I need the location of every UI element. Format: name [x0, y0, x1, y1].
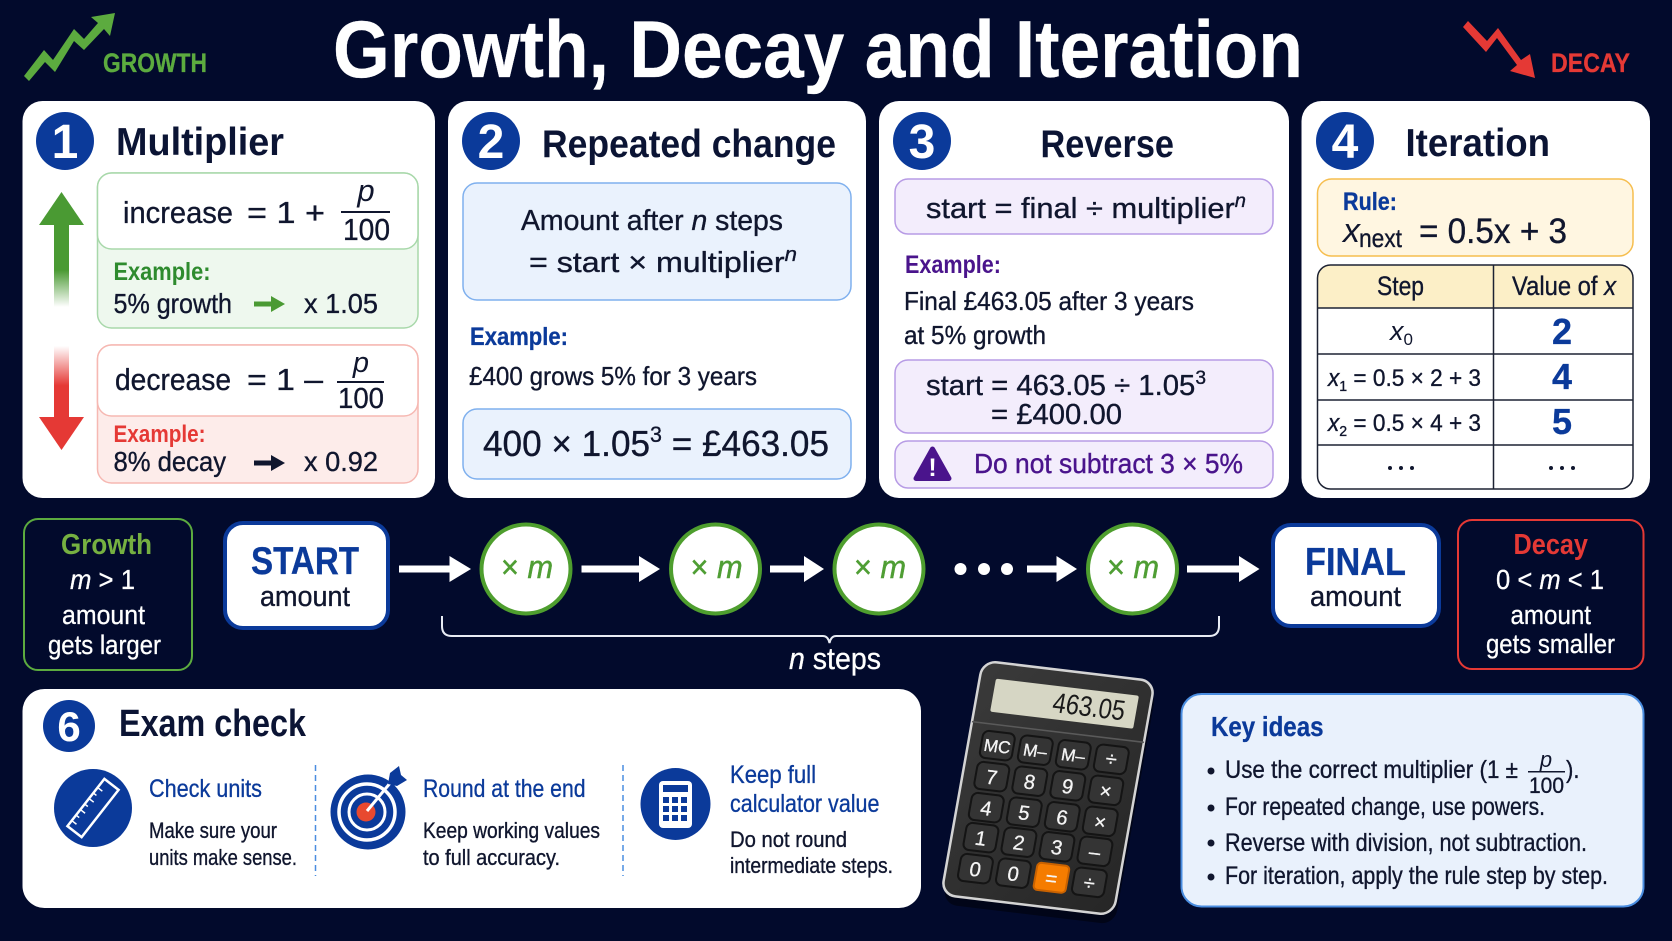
box: rule: [1318, 179, 1633, 256]
badge 2: [462, 112, 520, 170]
bullet: multiplier: 100: [1529, 773, 1564, 798]
flow: multiplier last step: [1088, 524, 1177, 614]
icon: growth arrow with label: [24, 13, 207, 81]
calculator keys: M–: [1022, 739, 1049, 762]
flow: ellipsis dots: [954, 563, 1013, 575]
flow: final box: FINAL: [1305, 541, 1406, 584]
calculator keys: ÷: [1104, 748, 1119, 771]
box: amount formula: Amount after n steps: [521, 205, 783, 237]
callout: decay condition: 0 < m < 1: [1496, 564, 1604, 595]
badge 6: 6: [57, 703, 81, 750]
box: decrease formula: 8% decay: [114, 446, 226, 477]
flow: multiplier step 2: [671, 524, 760, 614]
calculator keys: ×: [1092, 811, 1108, 834]
heading: repeated change: Repeated change: [542, 123, 836, 166]
text: keep full calculator value: Keep full: [730, 761, 816, 789]
brace with n steps label: [442, 616, 1219, 676]
box: worked reverse: 3: [1195, 368, 1206, 389]
panel: exam check: [22, 689, 921, 908]
callout: growth condition: [24, 519, 192, 670]
example text: Example:: [470, 323, 568, 351]
box: increase formula: 5% growth: [114, 288, 232, 319]
table: iteration steps: Value of x: [1512, 271, 1617, 301]
brace with n steps label: n steps: [789, 641, 881, 676]
flow: final box: amount: [1310, 581, 1401, 613]
calculator keys: 8: [1022, 771, 1037, 794]
title: Growth, Decay and Iteration: [333, 5, 1303, 95]
box: worked reverse: start = 463.05 ÷ 1.05: [926, 370, 1193, 402]
flow: start box: [225, 523, 388, 628]
calculator keys: M–: [1060, 744, 1087, 767]
icon: growth arrow with label: GROWTH: [103, 48, 207, 78]
table: iteration steps: x: [1327, 365, 1340, 392]
box: rule: = 0.5x + 3: [1419, 212, 1567, 251]
callout: decay condition: amount: [1510, 600, 1591, 630]
calculator keys: 3: [1049, 837, 1064, 860]
table ellipsis dots: [1388, 466, 1575, 470]
calculator keys: 1: [973, 828, 988, 851]
example text: at 5% growth: [904, 320, 1046, 350]
box: worked result: = £463.05: [662, 423, 829, 464]
table: iteration steps: 2: [1552, 311, 1572, 352]
table: iteration steps: 1: [1339, 378, 1347, 395]
calculator keys: [957, 730, 1130, 898]
panel: iteration: [1302, 101, 1650, 498]
flow: multiplier step 3: [834, 524, 924, 614]
panel: key ideas: [1182, 694, 1644, 906]
box: reverse formula: [895, 179, 1273, 234]
illustration: calculator: [940, 661, 1158, 925]
icon: calculator: [640, 768, 710, 840]
box: amount formula: [463, 183, 851, 300]
calculator keys: ×: [1098, 780, 1113, 803]
calculator keys: 0: [1006, 863, 1021, 886]
box: amount formula: n: [785, 244, 797, 266]
arrow: step 1 to step 2: [582, 556, 660, 582]
box: decrease formula: Example:: [114, 421, 206, 448]
box: reverse formula: start = final ÷ multiplier: [926, 193, 1217, 225]
box: increase formula: p: [356, 173, 375, 208]
panel: repeated change: [448, 101, 866, 498]
text: keep full calculator value: calculator value: [730, 790, 880, 818]
text: round at the end: Round at the end: [423, 775, 586, 803]
calculator keys: 0: [968, 859, 983, 882]
badge 2: 2: [478, 116, 504, 169]
box: increase formula: x 1.05: [304, 288, 378, 319]
callout: warning: !: [928, 454, 937, 482]
box: decrease formula: 100: [338, 383, 384, 415]
heading: key ideas: Key ideas: [1211, 711, 1324, 742]
icon: decay arrow with label: [1463, 21, 1630, 78]
icon: green up arrow: [39, 192, 84, 307]
flow: multiplier step 2: × m: [690, 549, 742, 585]
text: round at the end: to full accuracy.: [423, 845, 560, 870]
text: check units: Make sure your: [149, 818, 277, 843]
box: decrease formula: = 1 –: [247, 362, 324, 397]
flow: final box: [1273, 525, 1439, 626]
example text: Final £463.05 after 3 years: [904, 286, 1194, 316]
calculator keys: 2: [1011, 832, 1026, 855]
callout: decay condition: gets smaller: [1486, 629, 1615, 659]
table: iteration steps: 4: [1552, 356, 1572, 397]
arrow: step 2 to step 3: [770, 556, 824, 582]
table: iteration steps: = 0.5 × 4 + 3: [1347, 410, 1481, 437]
icon: ruler: [54, 769, 132, 847]
callout: growth condition: m > 1: [70, 564, 135, 595]
box: rule: Rule:: [1343, 188, 1397, 216]
flow: start box: amount: [260, 581, 350, 613]
bullet: multiplier: [1208, 747, 1580, 798]
badge 3: [893, 112, 951, 170]
callout: decay condition: [1458, 520, 1644, 669]
box: increase formula: increase: [123, 195, 233, 230]
box: worked reverse: = £400.00: [991, 399, 1122, 431]
bullet: reverse: Reverse with division, not subtraction.: [1225, 829, 1587, 857]
table: iteration steps: Step: [1377, 271, 1424, 301]
example text: [469, 323, 757, 391]
calculator keys: 5: [1017, 802, 1032, 825]
box: rule: x: [1341, 212, 1361, 250]
callout: growth condition: gets larger: [48, 630, 161, 660]
calculator keys: 4: [979, 798, 994, 821]
flow: start box: START: [251, 540, 359, 583]
box: increase formula: Example:: [114, 258, 210, 286]
badge 1: [36, 112, 94, 170]
badge 4: [1316, 112, 1374, 170]
box: decrease formula: p: [352, 347, 369, 379]
heading: reverse: Reverse: [1040, 123, 1174, 166]
table: iteration steps: [1318, 265, 1633, 489]
icon: target: [330, 766, 407, 850]
bullet: multiplier: p: [1539, 747, 1552, 772]
calculator display: [990, 679, 1139, 729]
calculator keys: =: [1043, 868, 1059, 891]
callout: growth condition: Growth: [61, 529, 152, 561]
text: keep full calculator value: Do not round: [730, 827, 847, 852]
calculator keys: ÷: [1082, 872, 1097, 895]
text: keep full calculator value: [730, 761, 893, 878]
heading: exam check: Exam check: [119, 703, 307, 745]
bullet: multiplier: ).: [1566, 756, 1580, 784]
table: iteration steps: 5: [1552, 401, 1572, 442]
calculator keys: MC: [982, 735, 1012, 758]
calculator keys: 6: [1055, 807, 1070, 830]
callout: warning: Do not subtract 3 × 5%: [974, 448, 1243, 479]
callout: decay condition: Decay: [1514, 529, 1588, 561]
flow: multiplier last step: × m: [1107, 549, 1159, 585]
icon: red down arrow: [39, 346, 84, 450]
icon: decay arrow with label: DECAY: [1551, 48, 1630, 78]
callout: growth condition: amount: [62, 600, 145, 630]
text: check units: [149, 775, 297, 870]
example text: £400 grows 5% for 3 years: [469, 361, 757, 391]
box: worked result: 3: [650, 422, 662, 447]
badge 6: [43, 700, 95, 752]
example text: [904, 251, 1194, 350]
flow: multiplier step 1: × m: [501, 549, 553, 585]
badge 1: 1: [52, 116, 78, 169]
calculator keys: –: [1087, 841, 1103, 865]
box: increase formula: [98, 173, 418, 328]
box: decrease formula: x 0.92: [304, 446, 378, 477]
box: amount formula: = start × multiplier: [529, 247, 759, 279]
calculator keys: 7: [984, 767, 999, 790]
text: keep full calculator value: intermediate steps.: [730, 853, 893, 878]
table: iteration steps: x: [1327, 410, 1340, 437]
table: iteration steps: 0: [1404, 330, 1413, 349]
calculator keys: 9: [1060, 776, 1075, 799]
text: round at the end: Keep working values: [423, 818, 600, 843]
heading: iteration: Iteration: [1406, 122, 1550, 165]
bullet: multiplier: Use the correct multiplier (1 ±: [1225, 756, 1518, 784]
bullet: iteration: For iteration, apply the rule step by step.: [1225, 862, 1608, 890]
panel: reverse: [879, 101, 1289, 498]
panel: multiplier: [22, 101, 435, 498]
box: worked reverse: [895, 360, 1273, 433]
box: decrease formula: [98, 345, 418, 483]
table: iteration steps: x: [1390, 316, 1404, 346]
arrow: last step to final: [1187, 556, 1260, 582]
box: increase formula: = 1 +: [247, 195, 325, 230]
flow: multiplier step 1: [482, 524, 570, 614]
box: rule: next: [1359, 223, 1403, 253]
table: iteration steps: 2: [1339, 423, 1347, 440]
callout: warning: [895, 441, 1273, 488]
box: increase formula: 100: [343, 212, 390, 247]
badge 3: 3: [909, 116, 935, 169]
box: worked result: 400 × 1.05: [483, 423, 654, 464]
text: check units: Check units: [149, 775, 262, 803]
badge 4: 4: [1332, 116, 1359, 169]
text: round at the end: [423, 775, 600, 870]
text: check units: units make sense.: [149, 845, 297, 870]
heading: multiplier: Multiplier: [116, 121, 284, 164]
box: worked result: [463, 409, 851, 479]
table: iteration steps: = 0.5 × 2 + 3: [1347, 365, 1481, 392]
arrow: dots to last step: [1027, 556, 1077, 582]
flow: multiplier step 3: × m: [854, 549, 906, 585]
box: reverse formula: n: [1235, 191, 1246, 212]
example text: Example:: [905, 251, 1001, 279]
calculator display: 463.05: [1050, 687, 1128, 727]
bullet: powers: For repeated change, use powers.: [1225, 793, 1545, 821]
box: decrease formula: decrease: [115, 362, 231, 397]
arrow: start to step 1: [399, 556, 471, 582]
